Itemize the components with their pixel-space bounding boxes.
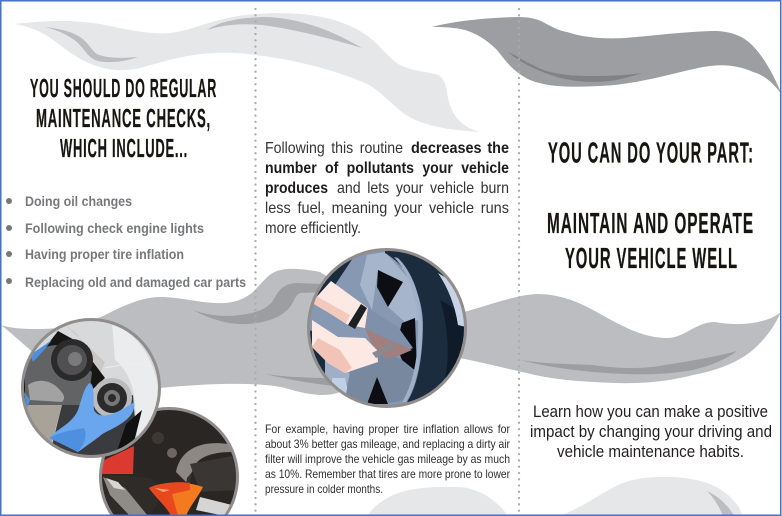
- bullet list: maintenance checks: Doing oil changes: [25, 193, 132, 209]
- photo circle: tire pressure check: [308, 249, 470, 407]
- text block: tire inflation example: about 3% better gas mileage, and replacing a dirty air: [265, 437, 510, 451]
- heading: regular maintenance checks: MAINTENANCE CHECKS,: [36, 105, 211, 133]
- text block: routine benefits: more efficiently.: [265, 220, 361, 237]
- heading: regular maintenance checks: [30, 75, 217, 163]
- photo circle: pouring oil into funnel: [100, 408, 240, 516]
- bullet list: maintenance checks: Replacing old and damaged car parts: [25, 274, 246, 290]
- bullet list: maintenance checks: [6, 193, 246, 290]
- text block: routine benefits: decreases the: [411, 140, 509, 157]
- swoosh: top right dark gray: [432, 17, 782, 95]
- text: YOU SHOULD DO REGULAR: [30, 75, 217, 103]
- text block: learn how: [530, 403, 772, 461]
- text block: tire inflation example: as 10%. Remember that tires are more prone to lower: [265, 467, 510, 481]
- text block: routine benefits: number of pollutants your vehicle: [265, 160, 509, 177]
- column dividers: dotted: [256, 9, 519, 515]
- bullet list: maintenance checks: Following check engine lights: [25, 220, 204, 236]
- text block: routine benefits: Following this routine: [265, 140, 403, 157]
- text block: routine benefits: less fuel, meaning your vehicle runs: [265, 200, 509, 217]
- text block: routine benefits: produces: [265, 180, 328, 197]
- heading: you can do your part: [547, 138, 754, 275]
- swoosh: middle band: [1, 269, 781, 395]
- text block: routine benefits: [265, 140, 509, 237]
- text block: tire inflation example: filter will improve the vehicle gas mileage by as much: [265, 452, 510, 466]
- text block: learn how: vehicle maintenance habits.: [557, 443, 744, 461]
- bullet list: maintenance checks: Having proper tire inflation: [25, 246, 184, 262]
- swoosh: top light gray: [14, 13, 480, 132]
- heading: regular maintenance checks: WHICH INCLUDE...: [60, 135, 188, 163]
- swoosh: bottom humps: [367, 477, 742, 516]
- text block: tire inflation example: pressure in colder months.: [265, 482, 383, 496]
- text block: routine benefits: and lets your vehicle burn: [337, 180, 509, 197]
- photo circle: oil filter change: [22, 319, 160, 457]
- text block: tire inflation example: For example, having proper tire inflation allows for: [265, 422, 510, 436]
- text block: tire inflation example: [265, 422, 510, 496]
